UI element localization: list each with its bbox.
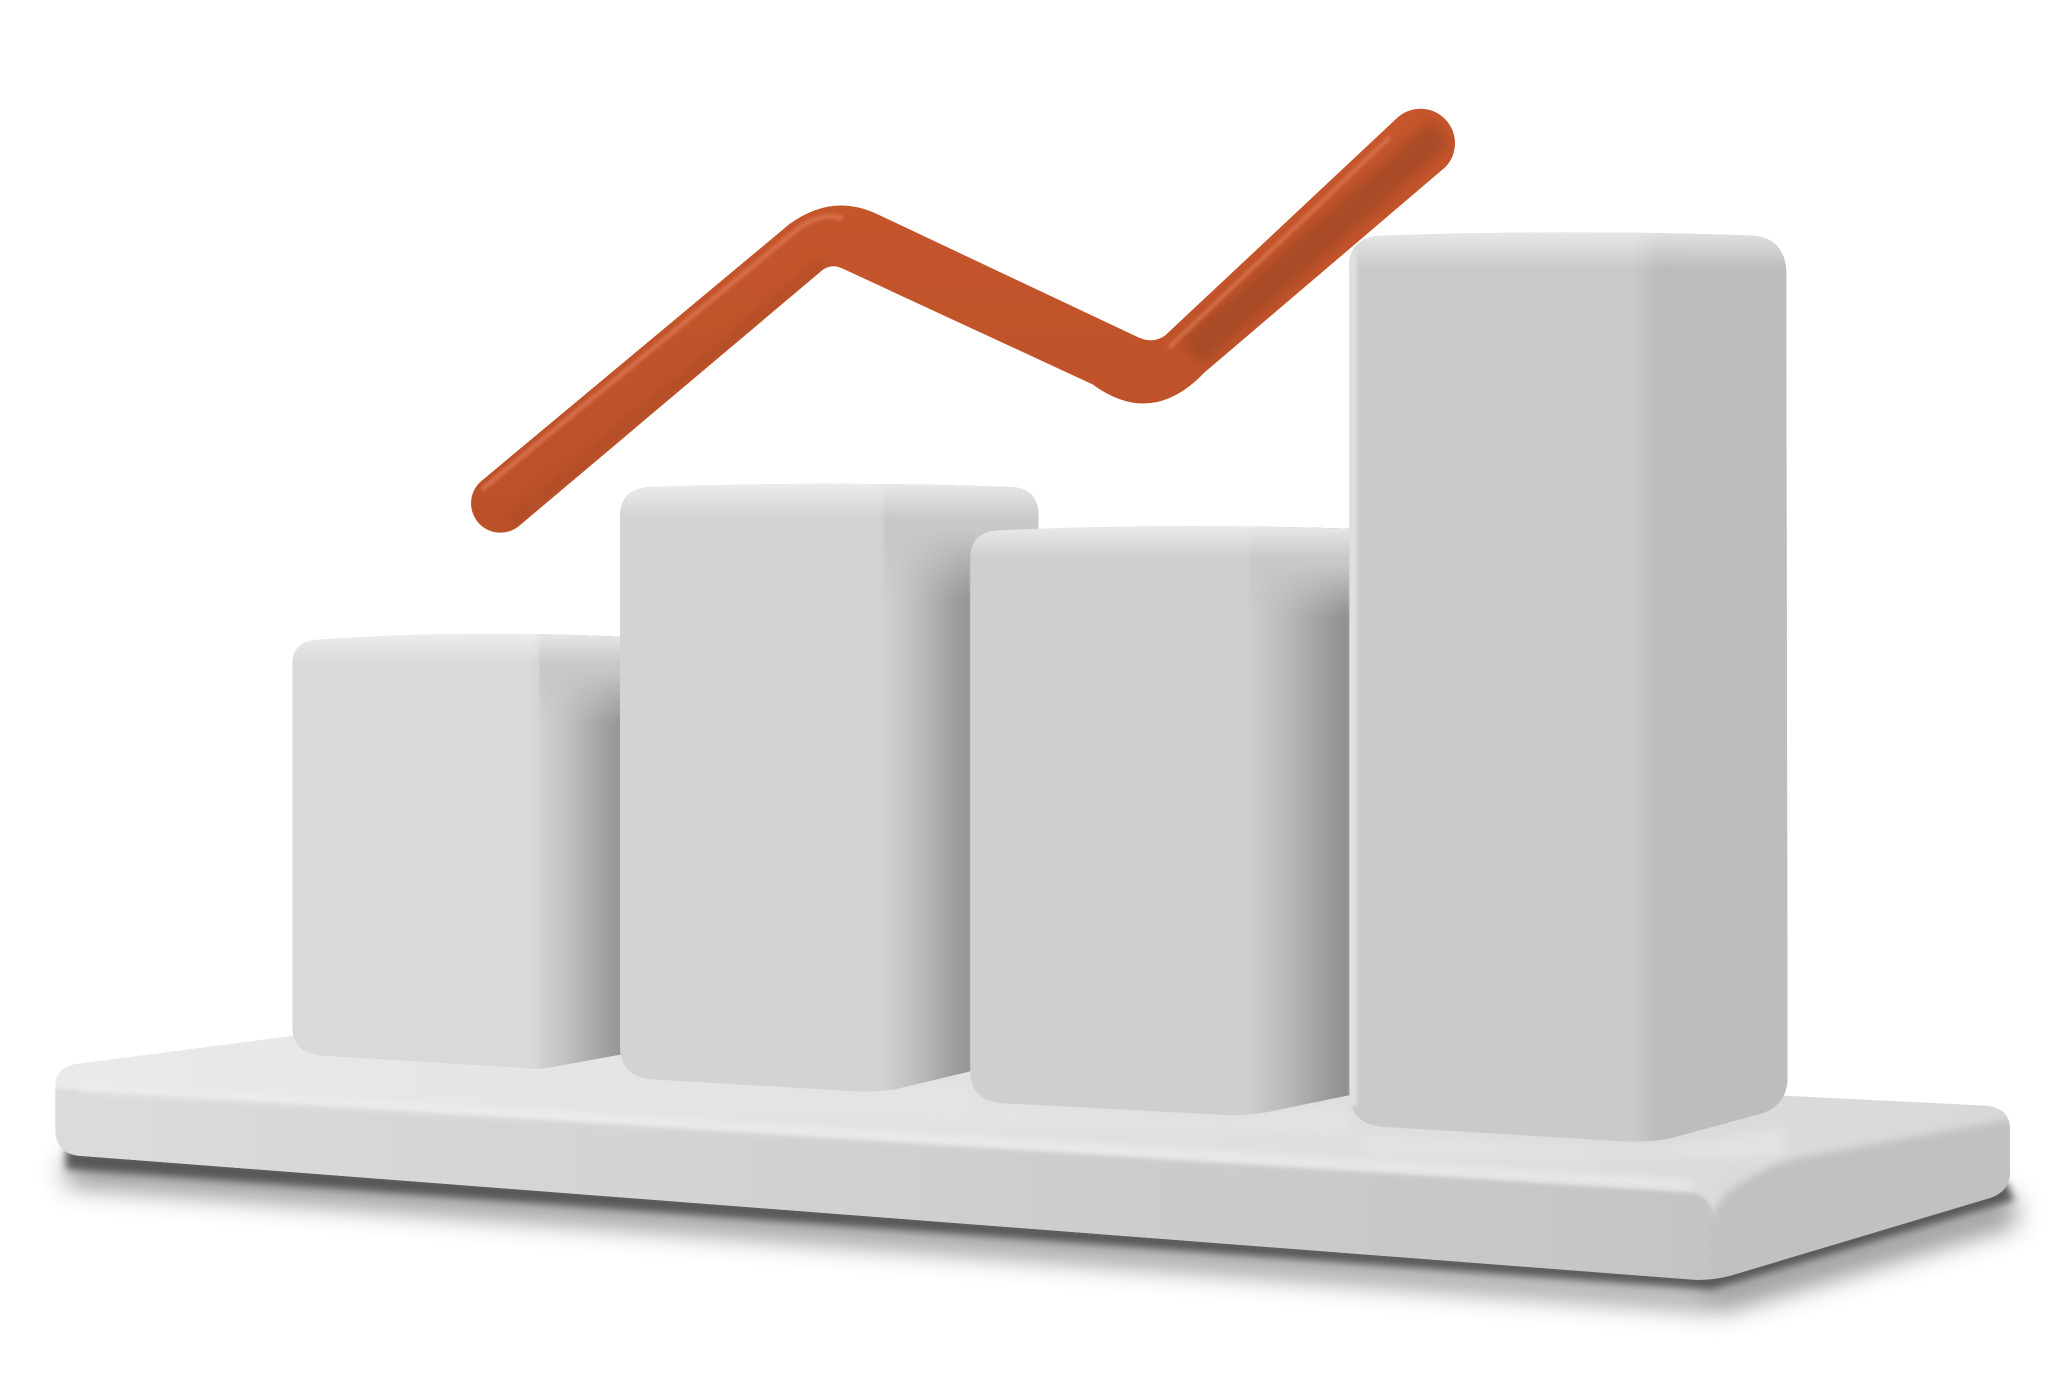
bar reflections [1743,1142,1774,1148]
base plate shadow [66,1148,2017,1310]
plate top surface [39,1027,2027,1290]
plate top edge highlight [1180,1152,1688,1188]
plate front face [56,1088,1719,1280]
bar 1 [292,634,621,1069]
bar 4 [1349,232,1788,1142]
plate side face [1714,1118,2010,1279]
line shading and highlights [482,132,1441,521]
base plate [55,1036,2010,1280]
bar 2 [620,484,1038,1092]
line body [471,109,1455,533]
bar 3 [970,526,1350,1116]
trend line [471,109,1455,533]
